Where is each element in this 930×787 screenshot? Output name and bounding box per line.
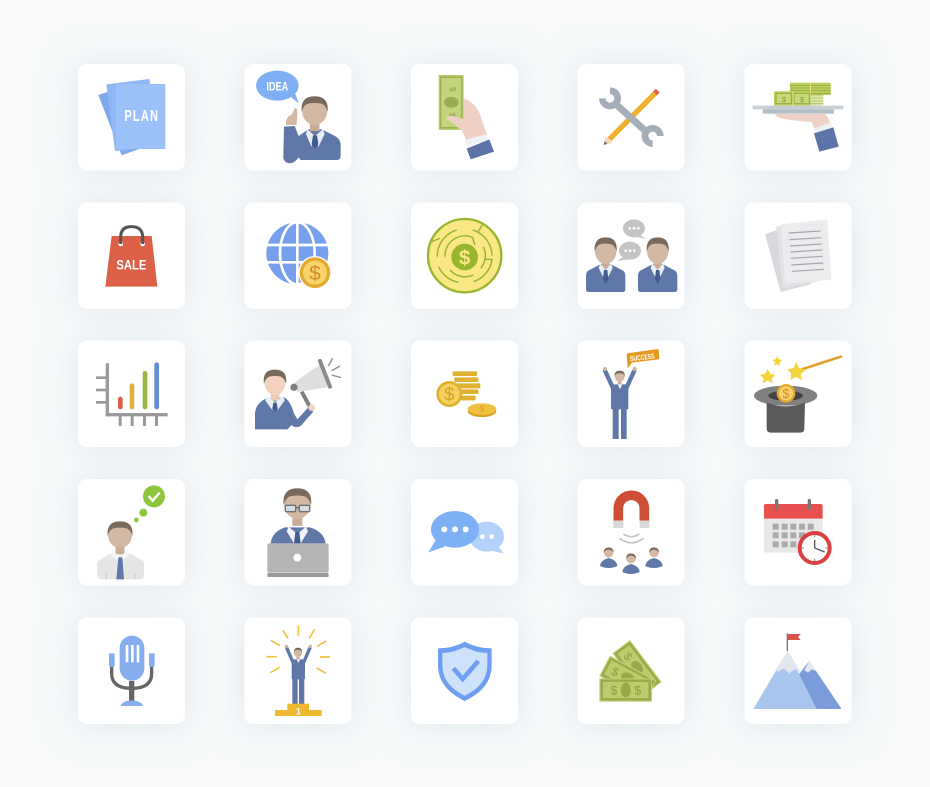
icon: microphone	[109, 636, 155, 706]
icon: idea person: IDEA	[266, 79, 289, 93]
icon: chat bubbles	[428, 511, 504, 554]
icon: money on a tray: $	[782, 95, 786, 104]
icon: coins: $	[444, 384, 455, 405]
icon: sale bag	[105, 227, 157, 287]
icon: success man	[603, 349, 659, 439]
icon: winner on podium	[266, 625, 330, 716]
icon: plan document	[98, 79, 165, 155]
icon: money on a tray: $	[800, 95, 804, 104]
icon: paper documents	[765, 219, 831, 292]
icon: magic hat with coin: $	[782, 387, 790, 401]
icon: success man: SUCCESS	[629, 351, 655, 363]
icon: magic hat with coin	[754, 356, 841, 433]
icon: hand with banknote: $	[448, 87, 458, 92]
icon: wrench and pencil	[602, 91, 660, 145]
icon: sale bag: SALE	[116, 256, 146, 272]
icon: man with megaphone	[255, 358, 341, 429]
icon: hand with banknote: $	[447, 113, 457, 118]
icon: money maze	[428, 219, 501, 292]
icon: hand with banknote	[439, 75, 494, 159]
icon: banknotes fan: $	[621, 651, 634, 664]
icon cards	[78, 64, 852, 724]
icon: banknotes fan: $	[611, 683, 618, 697]
icon: two men talking	[586, 219, 677, 292]
icon: magnet attracting people	[600, 495, 663, 574]
icon: bar chart	[96, 362, 168, 426]
icon: idea person	[256, 71, 341, 163]
icon: mountain with flag	[753, 633, 842, 709]
icon: globe with coin	[266, 222, 332, 289]
icon: banknotes fan	[599, 640, 662, 702]
icon: winner on podium: 1	[296, 706, 301, 716]
icon: man with green check thought	[97, 485, 165, 579]
icon: calendar with clock	[764, 501, 830, 563]
icon: banknotes fan: $	[609, 666, 621, 680]
icon: money on a tray	[753, 83, 843, 152]
icon: security shield	[438, 642, 492, 701]
icon: plan document: PLAN	[124, 107, 159, 124]
icon: globe with coin: $	[309, 262, 321, 285]
icon: money maze: $	[459, 247, 471, 270]
icon: man with laptop	[267, 488, 329, 577]
icon: coins: $	[480, 405, 485, 414]
icon: coins	[436, 371, 496, 417]
icon: banknotes fan: $	[634, 683, 641, 697]
